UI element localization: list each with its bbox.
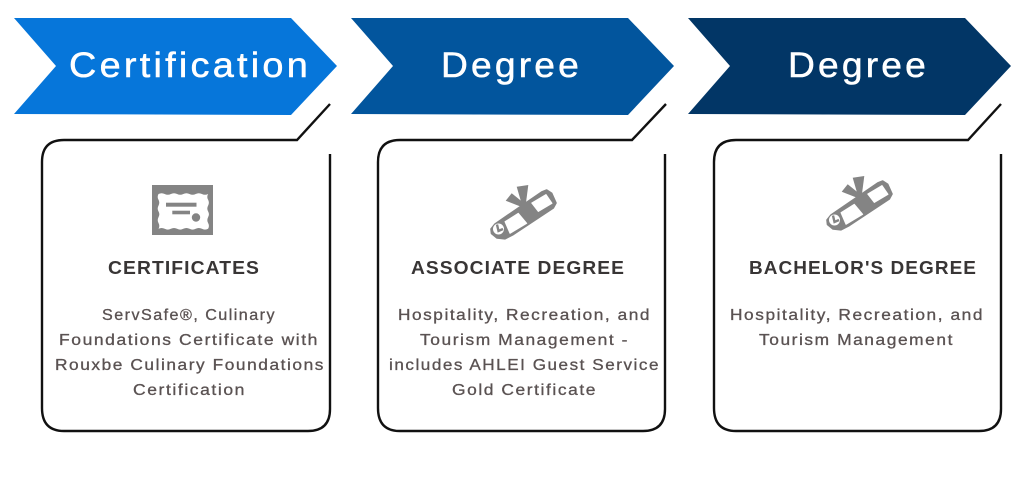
heading: associate degree: ASSOCIATE DEGREE bbox=[411, 258, 625, 278]
text: bachelor's degree description: Tourism Management bbox=[759, 332, 954, 349]
heading: certificates: CERTIFICATES bbox=[108, 258, 260, 278]
icon: certificate bbox=[152, 185, 213, 235]
panel outline: certificates bbox=[42, 104, 330, 431]
arrow: Certification: Certification bbox=[69, 46, 311, 85]
heading: bachelor's degree: BACHELOR'S DEGREE bbox=[749, 258, 977, 278]
text: certificates description: Rouxbe Culinary Foundations bbox=[55, 357, 325, 374]
text: associate degree description: Tourism Management - bbox=[420, 332, 629, 349]
panel outline: bachelor's degree bbox=[714, 104, 1001, 431]
text: certificates description: ServSafe®, Culinary bbox=[102, 307, 276, 324]
text: certificates description bbox=[55, 307, 325, 399]
icon: diploma scroll bbox=[827, 176, 892, 230]
panel outline: associate degree bbox=[378, 104, 666, 431]
arrow: Certification bbox=[14, 18, 337, 115]
text: associate degree description: Hospitality, Recreation, and bbox=[398, 307, 651, 324]
text: associate degree description: includes AHLEI Guest Service bbox=[389, 357, 660, 374]
text: associate degree description: Gold Certificate bbox=[452, 382, 597, 399]
text: bachelor's degree description bbox=[730, 307, 984, 349]
text: certificates description: Foundations Certificate with bbox=[59, 332, 319, 349]
text: associate degree description bbox=[389, 307, 660, 399]
arrow: Degree (associate) bbox=[351, 18, 674, 115]
panel: bachelor's degree bbox=[714, 104, 1001, 431]
text: bachelor's degree description: Hospitality, Recreation, and bbox=[730, 307, 984, 324]
text: certificates description: Certification bbox=[133, 382, 246, 399]
icon: diploma scroll bbox=[491, 185, 556, 239]
panel: associate degree bbox=[378, 104, 666, 431]
arrow: Degree (bachelor's): Degree bbox=[788, 46, 929, 85]
arrow: Degree (associate): Degree bbox=[441, 46, 582, 85]
arrow: Degree (bachelor's) bbox=[688, 18, 1011, 115]
panel: certificates bbox=[42, 104, 330, 431]
